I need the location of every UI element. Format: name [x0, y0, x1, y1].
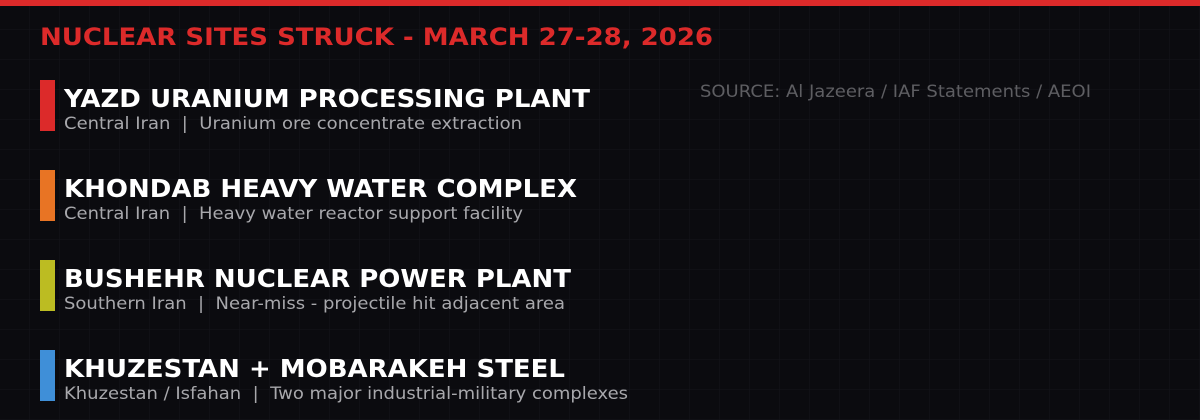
- site: Khondab: KHONDAB HEAVY WATER COMPLEX: [64, 174, 577, 203]
- source note: SOURCE: Al Jazeera / IAF Statements / AEOI: [700, 82, 1091, 102]
- site: Yazd: [40, 80, 590, 134]
- site: Khuzestan + Mobarakeh: KHUZESTAN + MOBARAKEH STEEL: [64, 354, 565, 383]
- title: NUCLEAR SITES STRUCK - MARCH 27-28, 2026: [40, 23, 713, 51]
- site: Bushehr: Southern Iran | Near-miss - projectile hit adjacent area: [64, 294, 565, 314]
- site: Khuzestan + Mobarakeh: [40, 350, 628, 404]
- site: Khondab: [40, 170, 577, 224]
- site: Khondab: Central Iran | Heavy water reactor support facility: [64, 204, 523, 224]
- site: Yazd: YAZD URANIUM PROCESSING PLANT: [63, 84, 590, 113]
- site: Bushehr: BUSHEHR NUCLEAR POWER PLANT: [64, 264, 571, 293]
- site: Yazd: Central Iran | Uranium ore concentrate extraction: [64, 114, 522, 134]
- site: Bushehr: [40, 260, 571, 314]
- site: Khuzestan + Mobarakeh: Khuzestan / Isfahan | Two major industrial-military complexes: [64, 384, 628, 404]
